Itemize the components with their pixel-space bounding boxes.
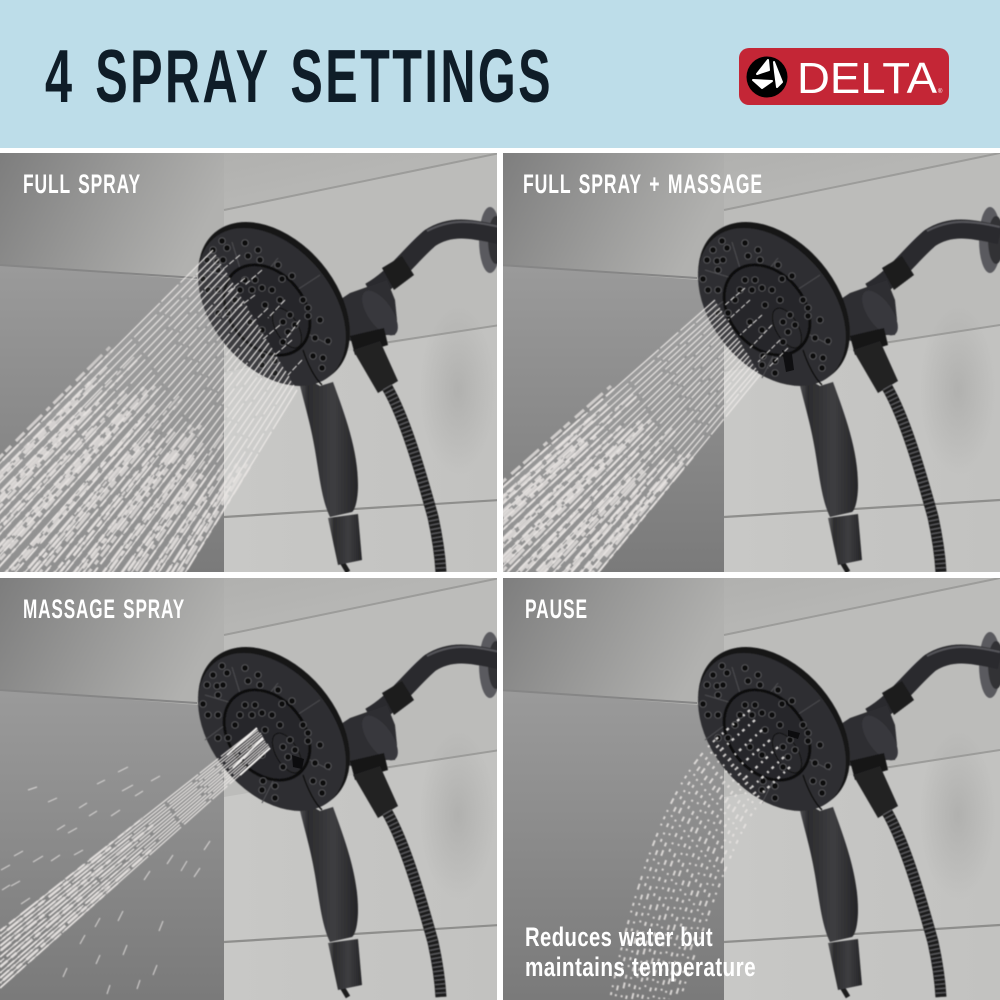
label: full spray + massage: FULL SPRAY + MASSAGE	[523, 169, 763, 199]
control knob	[782, 350, 794, 372]
logo: Delta: ®	[938, 88, 943, 95]
note: reduces water: Reduces water but	[525, 922, 713, 952]
water spray: pause	[610, 710, 790, 999]
water spray: massage	[0, 728, 270, 994]
logo: Delta	[739, 48, 949, 105]
panel: massage spray	[0, 575, 504, 1000]
shower wall background	[500, 150, 1000, 575]
water spray: full	[0, 249, 303, 572]
label: pause: PAUSE	[525, 594, 588, 624]
icon: shower fixture	[197, 206, 497, 572]
water spray: full + massage	[503, 287, 789, 572]
title: 4 SPRAY SETTINGS	[45, 34, 553, 118]
panel: full spray + massage	[503, 153, 1000, 572]
shower wall background	[0, 575, 500, 1000]
logo: Delta: DELTA	[797, 54, 938, 103]
header band	[0, 0, 1000, 148]
note: reduces water: maintains temperature	[525, 952, 756, 982]
shower wall background	[0, 150, 500, 575]
icon: shower fixture	[197, 632, 497, 999]
label: massage spray: MASSAGE SPRAY	[23, 594, 185, 624]
panel: full spray	[0, 153, 497, 572]
label: full spray: FULL SPRAY	[23, 169, 141, 199]
control knob	[292, 755, 304, 769]
icon: shower fixture	[697, 206, 1000, 572]
control knob	[788, 730, 800, 739]
shower wall background	[500, 575, 1000, 1000]
panel: pause	[500, 575, 1000, 1000]
icon: shower fixture	[697, 632, 1000, 999]
note: reduces water	[525, 922, 756, 982]
water scatter droplets	[1, 767, 210, 994]
